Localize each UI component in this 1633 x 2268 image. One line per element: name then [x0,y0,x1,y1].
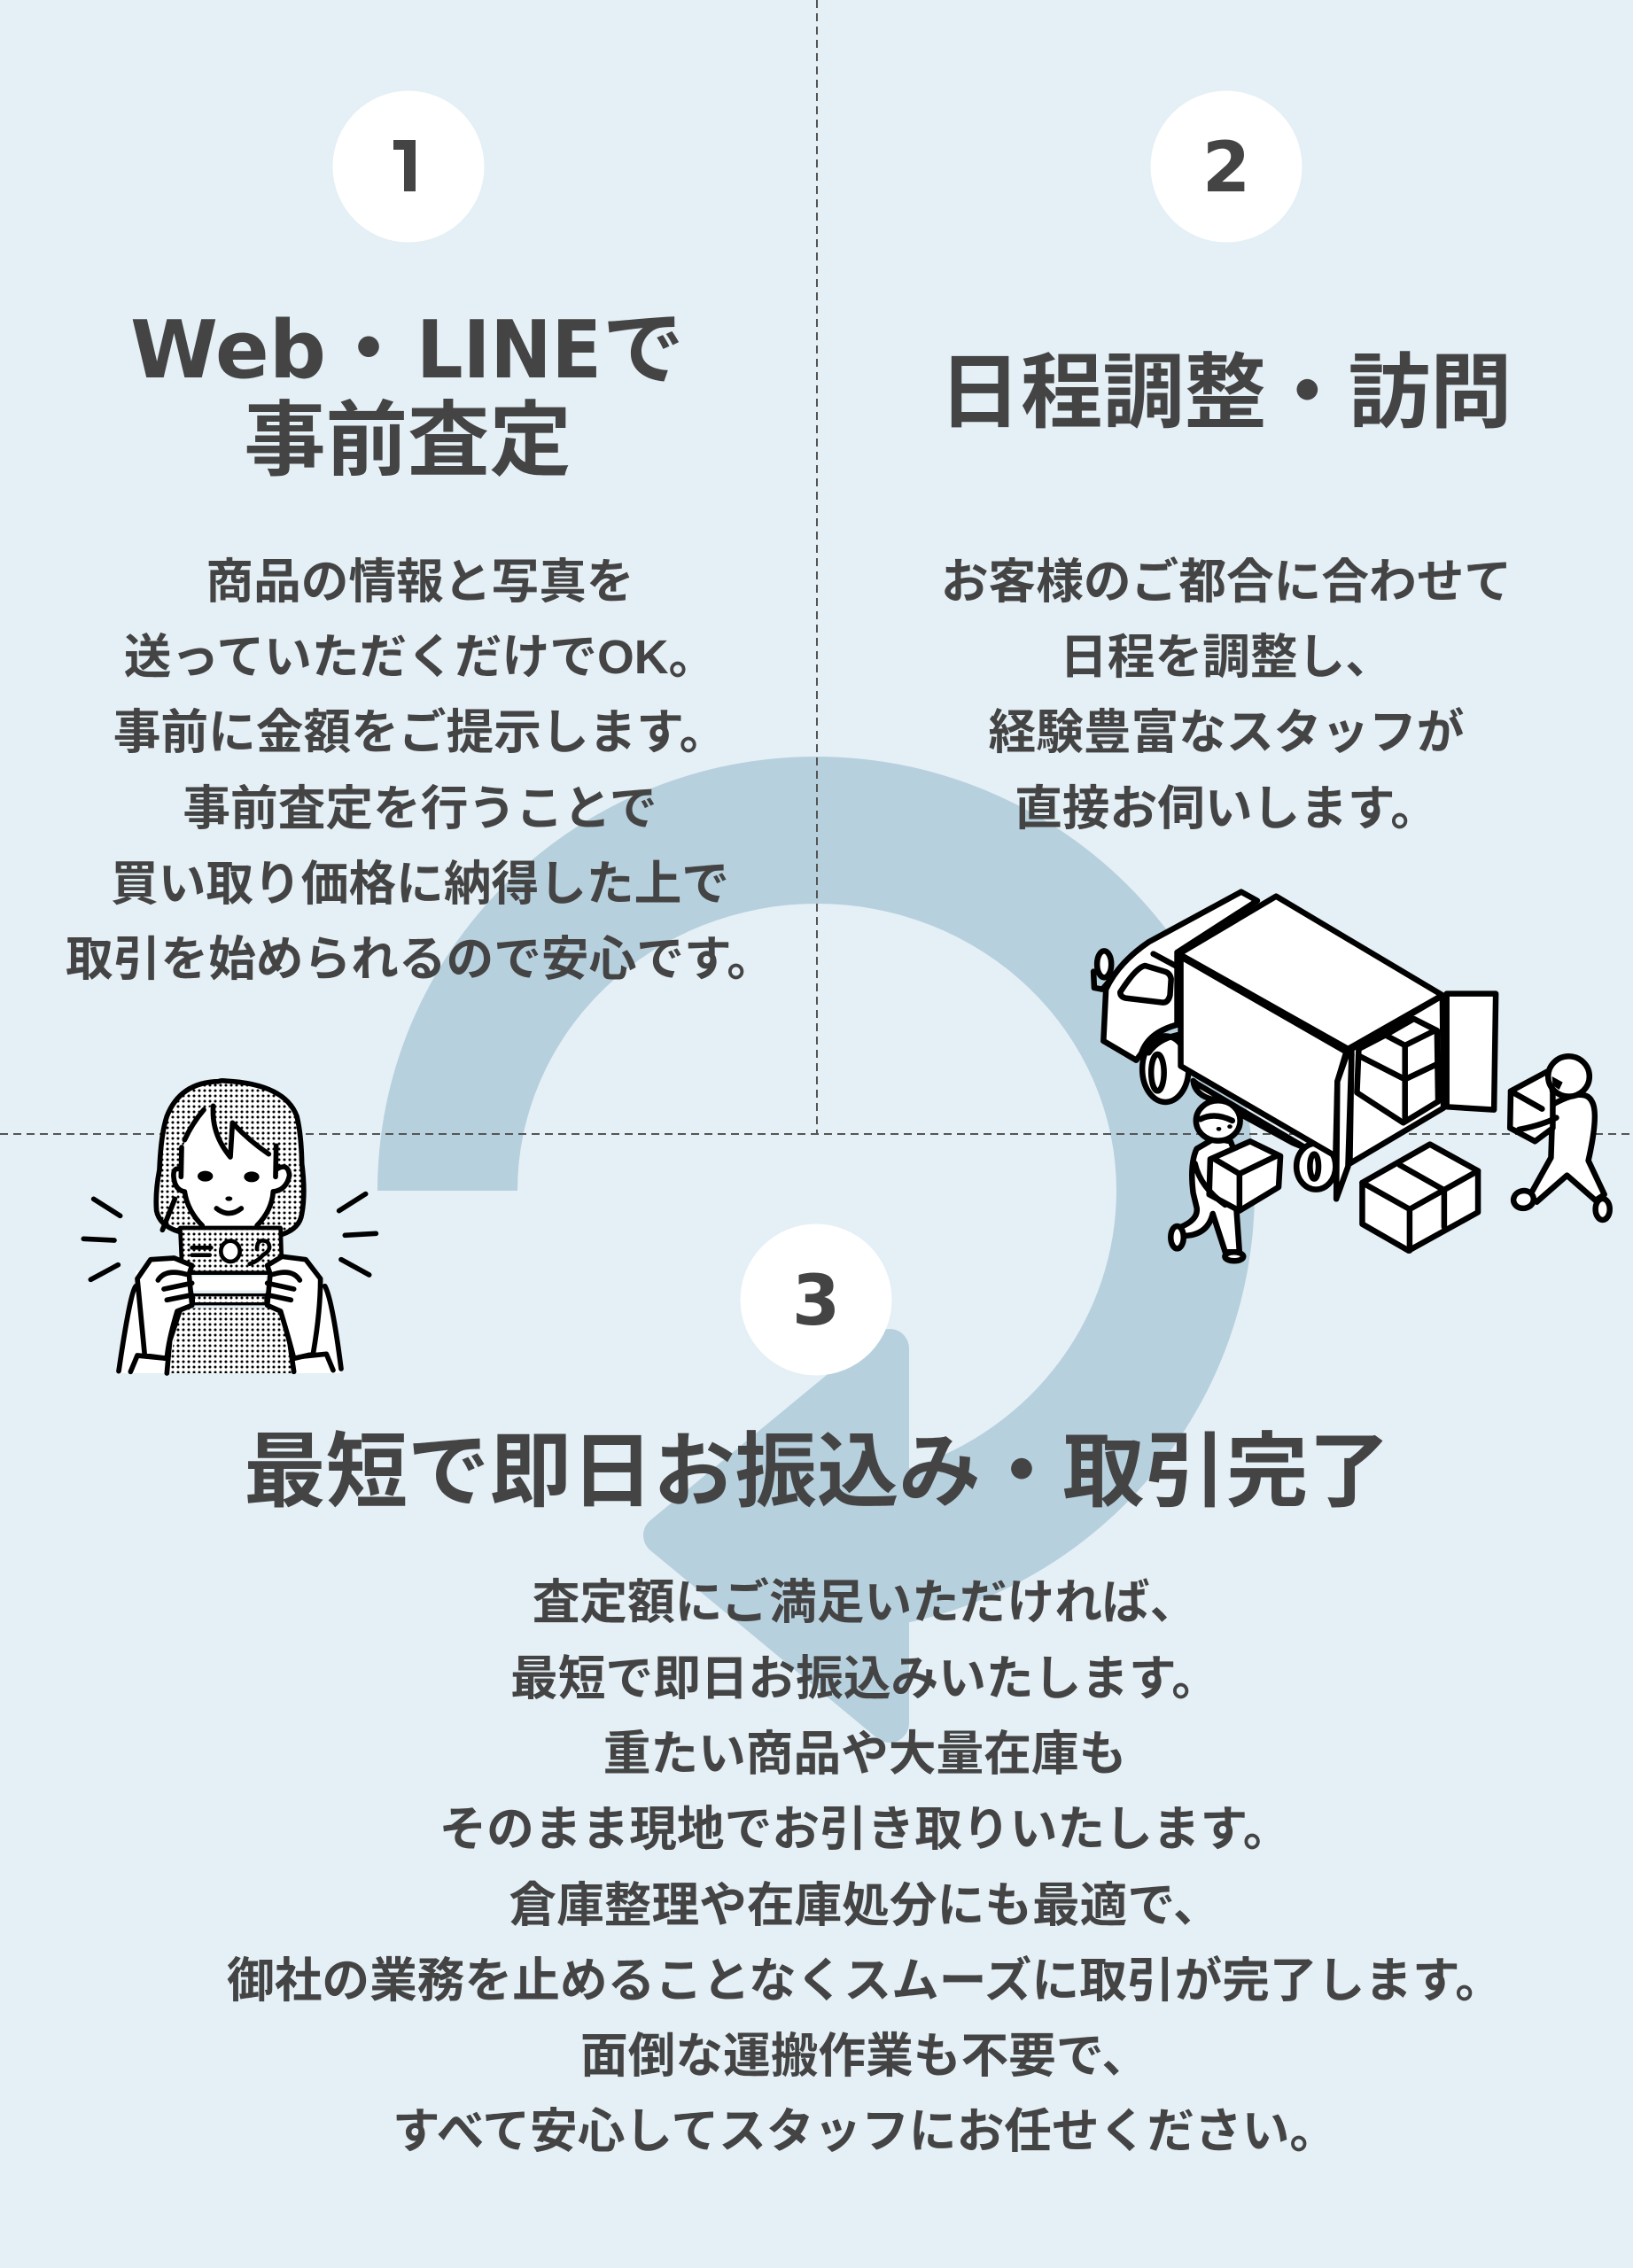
boxes in cargo [1357,1019,1438,1122]
heading 1 [130,304,684,486]
body text step 3: 査定額にご満足いただければ、 [533,1576,1197,1629]
hair [156,1081,304,1234]
heading 1: 事前査定 [244,394,572,486]
sleeves [120,1270,341,1373]
apron [168,1309,294,1373]
open door left [1336,1054,1351,1199]
body text step 3 [227,1576,1503,2158]
body text step 1: 商品の情報と写真を [206,555,634,609]
body text step 1 [66,555,774,986]
heading 1: LINE [416,304,602,397]
heading 1: Web [130,304,326,397]
cargo box [1179,897,1442,1049]
body text step 1: 事前査定を行うことで [183,782,657,835]
illustration: woman holding banknote [83,1081,376,1373]
number badge 3: 3 [792,1262,840,1341]
notes below [192,1277,266,1291]
truck cab [1103,892,1257,1060]
face [174,1106,290,1225]
body text step 1: 買い取り価格に納得した上で [111,858,729,911]
number badge 2 [1150,90,1303,243]
cab window and mirror [1120,966,1171,1003]
banknote [180,1228,282,1273]
number badge 2: 2 [1202,128,1250,208]
body text step 2: 日程を調整し、 [1060,631,1393,684]
body text step 1: 取引を始められるので安心です。 [66,933,774,986]
heading 3: 最短で即日お振込み・取引完了 [244,1425,1390,1518]
body text step 1: 事前に金額をご提示します。 [113,706,727,759]
worker left [1181,1138,1240,1252]
hands [137,1258,192,1358]
worker right [1529,1095,1605,1202]
body text step 3: 御社の業務を止めることなくスムーズに取引が完了します。 [227,1954,1503,2008]
number badge 1: 1 [380,128,432,214]
body text step 3: 倉庫整理や在庫処分にも最適で、 [509,1879,1221,1932]
heading 2: 日程調整・訪問 [939,346,1512,439]
body text step 2: 経験豊富なスタッフが [989,706,1464,759]
sparkle lines [83,1194,376,1279]
illustration: truck unloading with two workers [1093,892,1610,1261]
body text step 3: 最短で即日お振込みいたします。 [510,1652,1219,1705]
cycle arrow [377,757,1255,1723]
body text step 3: そのまま現地でお引き取りいたします。 [439,1803,1291,1856]
body text step 2 [941,555,1512,835]
quadrant dashed dividers [0,0,1633,1134]
body text step 2: お客様のご都合に合わせて [941,555,1512,609]
rear underside and wheel [1194,1081,1307,1149]
boxes on ground [1362,1145,1478,1251]
body text step 2: 直接お伺いします。 [1015,782,1438,835]
number badge 1 [333,90,484,243]
heading 1: ・ [328,305,409,395]
number badge 3 [741,1224,891,1375]
body text step 1: 送っていただくだけでOK。 [124,631,716,684]
heading 1: で [603,305,684,395]
body text step 3: すべて安心してスタッフにお任せください。 [393,2105,1337,2158]
body text step 3: 重たい商品や大量在庫も [603,1728,1126,1781]
body text step 3: 面倒な運搬作業も不要で、 [580,2030,1149,2083]
open door right [1447,994,1496,1110]
cargo interior [1349,996,1443,1163]
front wheel and fender [1142,1036,1188,1102]
eyes, nose and mouth [198,1171,260,1201]
